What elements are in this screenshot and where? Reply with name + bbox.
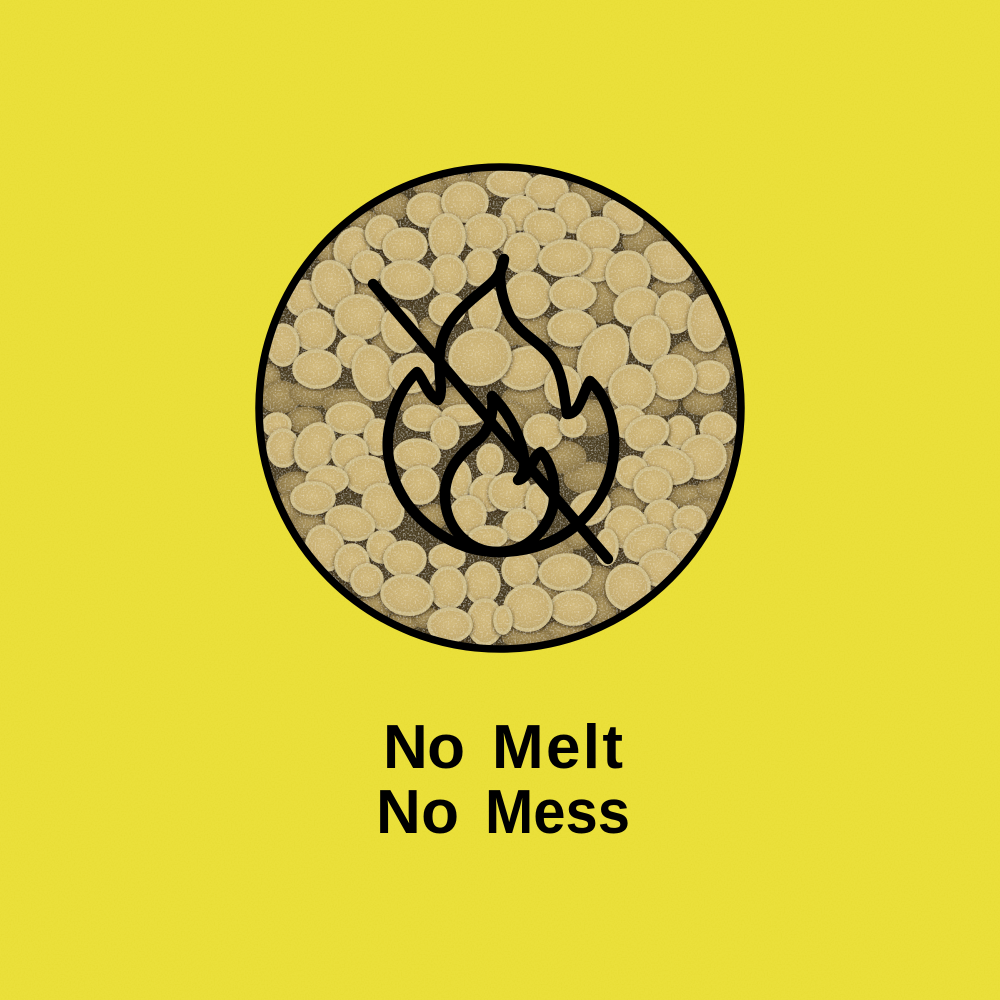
title line 1: No [383, 713, 465, 782]
circle outline [259, 167, 741, 649]
title [376, 713, 630, 847]
circular photo of pellets [259, 167, 741, 649]
infographic [255, 163, 745, 834]
inner flame [445, 396, 554, 552]
outer flame [388, 259, 614, 552]
title line 2: Mess [485, 778, 630, 847]
title line 1: Melt [492, 713, 623, 782]
icon: crossed-out flame [373, 259, 614, 559]
slash [373, 284, 608, 559]
title line 2: No [376, 778, 459, 847]
